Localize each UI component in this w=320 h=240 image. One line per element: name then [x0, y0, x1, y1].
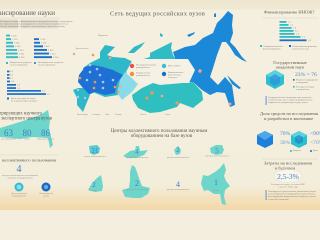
small map: 4: центра коллективного	[126, 157, 149, 159]
text block: funding intro right	[21, 20, 73, 28]
text block: academies note: Государственные академии наук получают	[268, 97, 312, 99]
legend: red marker: Исследовательские	[136, 64, 157, 66]
legend: country comparison: по странам мира, процент	[11, 100, 38, 102]
stat: 2,5-3%: 2,5-3%	[277, 172, 299, 181]
heading: state academies: академии наук	[276, 65, 305, 70]
legend: academies: Расходы на науку	[296, 86, 315, 88]
small map: 21: центр коллективного	[84, 156, 106, 158]
legend: orange marker: Федеральные	[136, 72, 151, 74]
panel: science funding	[0, 9, 73, 102]
map city labels: Мурманск	[98, 35, 108, 37]
bar chart: country comparison: 10	[47, 94, 50, 96]
bar chart: country comparison: 0,7	[10, 78, 14, 80]
legend: shares: Вузы	[313, 150, 319, 152]
heading: shared use: коллективного пользования	[2, 158, 57, 162]
bar chart: teal funding bars: 7 500	[18, 53, 25, 55]
heading: centres line one: Центры коллективного пользования научным	[111, 129, 208, 134]
heading: network of leading universities: Сеть ведущих российских вузов	[110, 10, 205, 18]
bar chart: teal funding bars: 3 400	[14, 43, 20, 45]
small map: 5: 5	[215, 147, 219, 155]
panel: shared use centres	[0, 155, 58, 198]
bar chart: NNOZH: 1,1	[288, 22, 292, 24]
panel: registered research centres	[0, 110, 54, 148]
bar chart: country comparison: 0,6	[10, 75, 14, 77]
bar chart: teal funding bars: 1 000	[11, 35, 17, 37]
text block: funding intro right: и научных организациях страны за период	[21, 26, 65, 28]
legend: funding bars: Внебюджетные средства	[38, 62, 64, 64]
small map: 4	[123, 146, 149, 159]
legend: red marker: университеты	[136, 67, 151, 69]
legend: blue marker: и центры	[168, 77, 178, 79]
map: Ural light blue	[117, 72, 138, 100]
heading: future research spending: в будущем	[275, 165, 295, 170]
captions: badges: Центр научного	[11, 193, 28, 195]
stat: 4: 4	[176, 180, 180, 189]
captions: badges	[11, 192, 53, 198]
map: far east blue	[173, 11, 247, 107]
caption: shared use: научным оборудованием	[7, 178, 33, 180]
bar chart: teal funding bars: 6 200	[18, 50, 24, 52]
legend: academies	[293, 79, 319, 91]
small map: far east: центр	[213, 190, 220, 192]
map: Novaya Zemlya	[128, 42, 145, 53]
text block: funding intro left: Расходы на науку из бюджета	[0, 21, 31, 23]
map markers	[73, 53, 232, 106]
small map: 2 Siberia	[122, 165, 150, 198]
heading: share of funds	[260, 111, 318, 121]
small map: 2 Siberia: центра коллективного	[126, 189, 149, 191]
text block: academies note: значительную часть средств федерального	[268, 99, 313, 102]
map: islands	[160, 13, 241, 89]
bar chart: NNOZH: 1,8	[293, 28, 297, 30]
stat: 86: 86	[41, 128, 50, 138]
map: central dark blue	[78, 65, 123, 95]
panel: share of research funds	[257, 111, 320, 201]
bar chart: country comparison: 0,9	[11, 81, 15, 83]
bar chart: NNOZH	[280, 21, 312, 42]
map city labels: Уфа	[105, 113, 110, 116]
bar chart: NNOZH: 4,0	[308, 40, 312, 42]
legend: funding bars	[6, 62, 64, 66]
legend: funding bars: Бюджетные средства	[10, 62, 33, 64]
caption: future spending	[271, 184, 306, 188]
text block: academies note: бюджета на гражданскую науку страны	[268, 102, 308, 104]
map city labels	[76, 35, 170, 116]
bar chart: country comparison: 9,1	[42, 91, 46, 93]
text block: academies note	[266, 96, 313, 105]
map: Siberia teal	[132, 82, 203, 113]
stat: 4: 4	[16, 164, 22, 175]
stat captions: вузов	[24, 138, 31, 140]
stat captions	[1, 138, 54, 140]
bar chart: country comparison: 2,4	[17, 85, 21, 87]
heading: state academies: Государственные	[273, 60, 307, 65]
text block: funding intro right: исследований, выполняемых в университетах	[21, 23, 69, 26]
legend: NNOZH: в расчёте на вуз	[292, 48, 309, 50]
small map: 21: 21	[92, 147, 99, 155]
bar chart: blue funding bars	[34, 38, 59, 59]
bar chart: NNOZH: 1,4	[290, 25, 294, 27]
map city labels: Архангельск	[76, 47, 89, 50]
legend: NNOZH	[260, 45, 318, 50]
small map: far east: 1	[214, 178, 218, 187]
bar chart: NNOZH: 2,3	[296, 34, 300, 36]
small map: 5	[205, 145, 230, 158]
bar chart: blue funding bars: 6 100	[50, 53, 56, 55]
stat: 4: центра коллективного	[167, 189, 190, 191]
bar chart: NNOZH: 2,1	[295, 31, 299, 33]
map: south teal	[73, 88, 90, 112]
legend: NNOZH: Объём финансирования	[292, 45, 318, 48]
small map: 4: 4	[135, 148, 139, 156]
legend: funding bars: на исследования	[10, 64, 28, 66]
legend: funding bars: на исследования	[38, 64, 56, 66]
bar chart: teal funding bars	[6, 35, 25, 59]
text block: funding intro left: по отдельным странам мира и	[0, 24, 32, 26]
stat: 80: 80	[22, 128, 32, 138]
legend: country comparison: Доля расходов на науку	[11, 98, 36, 100]
heading: state academies	[273, 60, 307, 70]
legend: orange marker: университеты	[136, 75, 151, 77]
legend: academies: и академии	[296, 82, 308, 84]
text block: future note: и частных компаний	[268, 198, 289, 201]
legend: blue marker	[162, 72, 184, 79]
legend: country comparison	[7, 98, 38, 102]
bar chart: teal funding bars: 2 100	[12, 39, 18, 41]
small map: Ural: центра коллективного	[167, 157, 190, 159]
legend: orange marker	[130, 72, 151, 77]
map city labels: Омск	[165, 114, 170, 116]
bar chart: blue funding bars: 2 300	[41, 43, 47, 45]
heading: future research spending: Затраты на исследования	[264, 160, 312, 166]
heading: centres line two: оборудованием на базе вузов	[131, 134, 193, 139]
legend: blue marker: вузы России	[168, 74, 181, 76]
bar chart: country comparison: 0,5	[10, 71, 14, 73]
stat: 4	[167, 180, 190, 191]
caption: shared use: центра коллективного пользования	[2, 175, 39, 177]
text block: future note	[266, 190, 316, 201]
icon: teal badge	[14, 182, 24, 192]
legend: shares: Бюджет	[293, 150, 301, 152]
small map: Ural	[167, 146, 190, 159]
stat: 90% and 70%	[310, 131, 320, 146]
bar chart: teal funding bars: 8 900	[19, 57, 25, 59]
heading: future research spending	[264, 160, 312, 170]
icon: teal cube	[291, 131, 307, 148]
bar chart: country comparison: 2,5	[17, 88, 21, 90]
map: teal north-west	[83, 45, 137, 97]
legend: red marker	[130, 64, 157, 69]
captions: badges: оборудования	[12, 196, 27, 198]
heading: NNOZH funding: Финансирование ННОЖ?	[264, 10, 314, 14]
stat: 63: 63	[4, 128, 14, 138]
text block: future note: при поддержке федерального бюджета страны	[268, 195, 316, 198]
icon: blue badge	[42, 182, 50, 192]
heading: share of funds: Доля средств на исследования	[260, 111, 318, 116]
small map: far east	[201, 163, 230, 205]
legend: shares	[290, 150, 319, 152]
bar chart: NNOZH: 3,1	[302, 37, 306, 39]
map: teal Russia	[0, 110, 53, 148]
legend: NNOZH: финансирования	[263, 48, 281, 50]
legend: academies: Научные учреждения	[296, 80, 319, 82]
stat: 70% and 30%: 30%	[280, 140, 291, 146]
map city labels: Томск	[140, 114, 146, 116]
icon: blue cube	[257, 131, 273, 148]
captions: badges: Инженерный	[39, 192, 53, 195]
small map: 5: центров коллективного	[205, 156, 230, 158]
small map: 21	[84, 145, 106, 158]
panel: NNOZH funding	[260, 10, 319, 105]
caption: future spending: Расходы на науку от объёма ВВП	[271, 184, 306, 186]
stat: 70% and 30%: 70%	[280, 131, 291, 137]
legend: blue marker: Национальные	[168, 72, 184, 74]
heading: share of funds: и разработки в экономике	[264, 116, 313, 121]
legend: NNOZH: Совокупный объём	[263, 45, 283, 48]
small map: 2 Siberia: 2	[135, 179, 139, 188]
captions: badges: центр	[43, 196, 50, 198]
text block: funding intro left	[0, 20, 32, 28]
panel: university network map	[73, 10, 247, 116]
callout: legend	[126, 59, 195, 83]
map city labels: Краснодар	[77, 114, 89, 116]
legend: teal marker: МГУ, СПбГУ	[168, 66, 181, 68]
bar chart: country comparison	[7, 71, 50, 96]
text block: future note: Планируется существенное увеличение затрат	[268, 191, 316, 193]
small map: 2 south-west: центра	[89, 190, 97, 192]
text block: funding intro right: Финансирование фундаментальных и прикладных	[21, 20, 73, 23]
map city labels: Пермь	[115, 114, 123, 116]
bar chart: blue funding bars: 3 500	[44, 46, 50, 48]
text block: future note: на исследования и разработки в вузах России	[268, 194, 316, 196]
small map: 2 south-west: 2	[92, 181, 96, 189]
text block: funding intro left: России в динамике за годы	[0, 26, 28, 28]
bar chart: blue funding bars: 8 200	[53, 57, 59, 59]
caption: shared use	[2, 175, 39, 180]
bar chart: blue funding bars: 4 900	[48, 50, 54, 52]
stat captions: научные центры	[37, 138, 54, 140]
small map: Ural: 2	[176, 146, 180, 154]
icon: teal cube	[266, 70, 284, 89]
bar chart: teal funding bars: 4 800	[15, 46, 21, 48]
stat: 23% = 76: 23% = 76	[295, 72, 317, 78]
stat: 70% and 30%	[280, 131, 291, 146]
legend: academies: и разработки	[296, 89, 310, 91]
map: north Siberia teal	[134, 42, 176, 75]
stat captions: исследования	[1, 138, 16, 140]
caption: future spending: страны к 2020 году	[278, 186, 299, 188]
panel: centres by federal district	[84, 129, 230, 205]
small map: 2 south-west	[88, 175, 103, 192]
bar chart: blue funding bars: 1 200	[40, 39, 46, 41]
map city labels: Самара	[92, 114, 101, 116]
